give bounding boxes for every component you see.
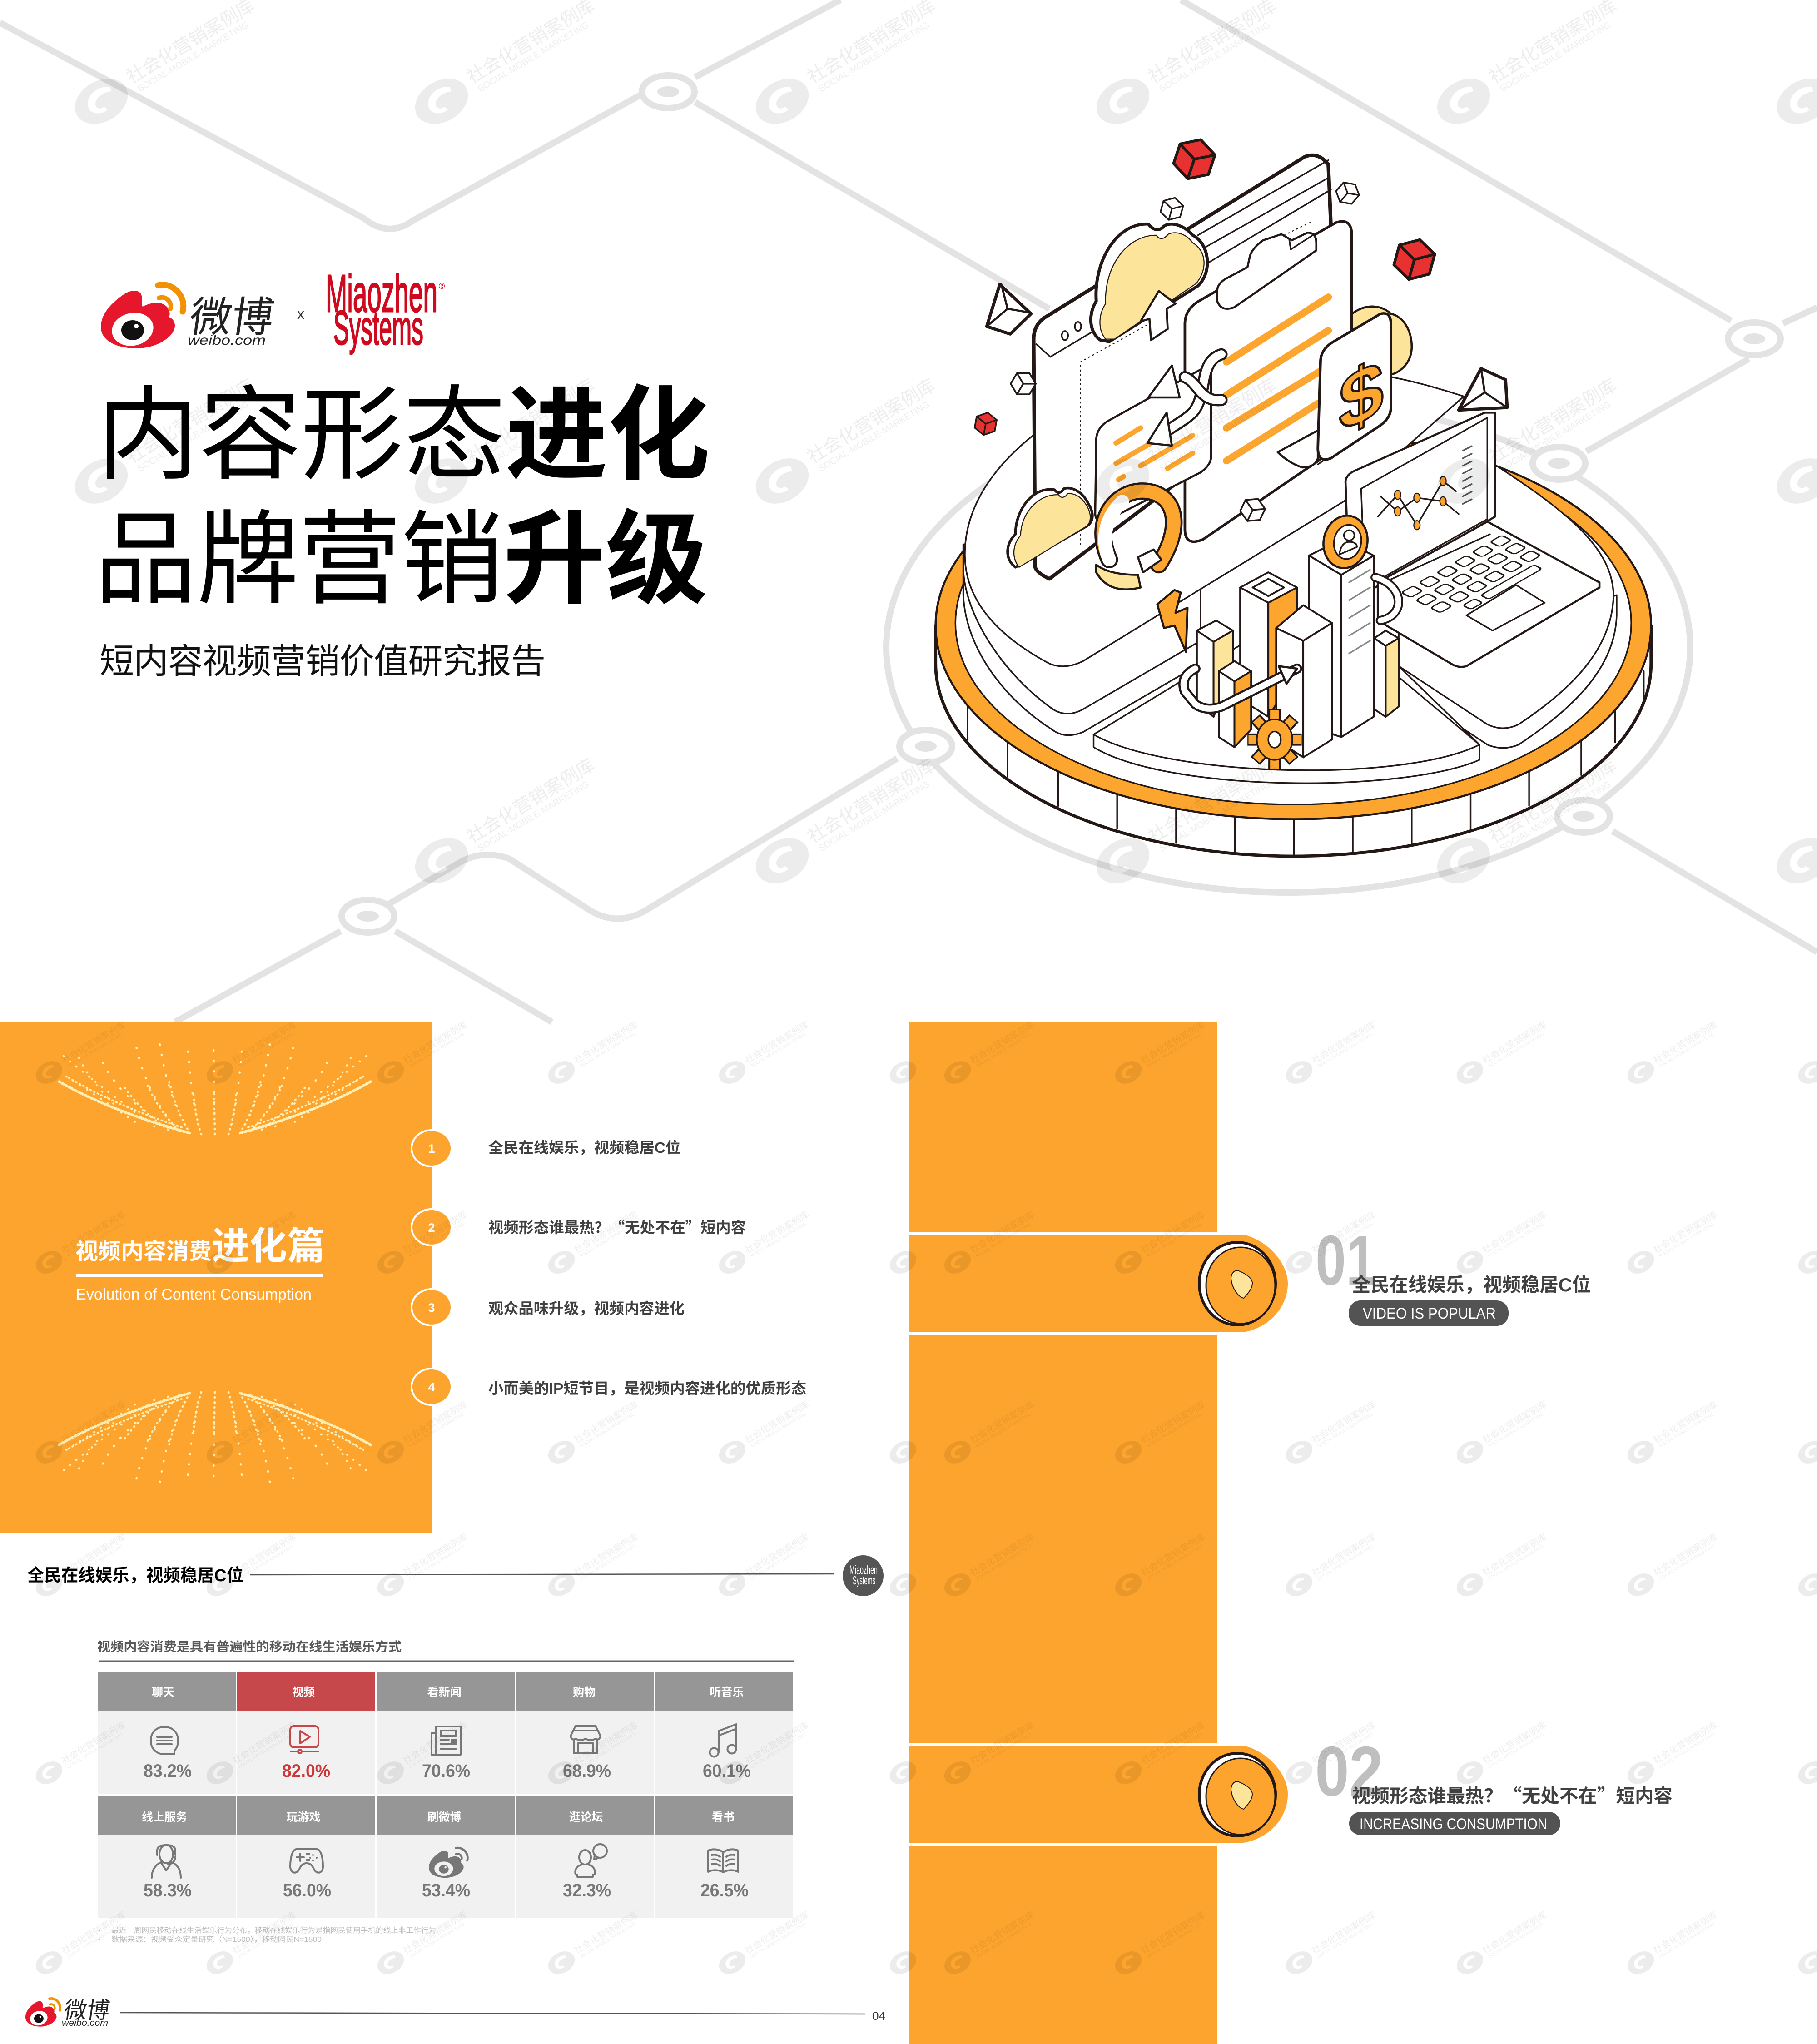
watermark layer: SOCIAL·MOBILE·MARKETING <box>66 1544 124 1582</box>
watermark layer: SOCIAL·MOBILE·MARKETING <box>237 1032 295 1069</box>
table: 53.4% <box>422 1880 470 1900</box>
watermark layer: SOCIAL·MOBILE·MARKETING <box>579 1222 636 1259</box>
Miaozhen Systems logo: Miaozhen <box>326 264 437 323</box>
agenda numbers: 3 <box>428 1301 435 1315</box>
watermark layer: 社会化营销案例库 <box>1310 1720 1378 1766</box>
watermark layer: SOCIAL·MOBILE·MARKETING <box>1658 1412 1716 1449</box>
panel: section cover <box>0 1022 806 1533</box>
watermark layer: SOCIAL·MOBILE·MARKETING <box>750 1412 807 1449</box>
watermark layer: SOCIAL·MOBILE·MARKETING <box>476 400 591 474</box>
watermark layer: SOCIAL·MOBILE·MARKETING <box>237 1412 295 1449</box>
watermark layer: SOCIAL·MOBILE·MARKETING <box>237 1222 295 1259</box>
watermark layer: SOCIAL·MOBILE·MARKETING <box>1487 1412 1545 1449</box>
icon: store <box>571 1726 601 1753</box>
watermark layer: SOCIAL·MOBILE·MARKETING <box>1146 1922 1203 1960</box>
agenda items: 全民在线娱乐，视频稳居C位 <box>488 1139 680 1156</box>
watermark layer: 社会化营销案例库 <box>231 1910 298 1956</box>
watermark layer: 社会化营销案例库 <box>231 1720 298 1766</box>
agenda items <box>488 1139 806 1397</box>
watermark layer: SOCIAL·MOBILE·MARKETING <box>237 1732 295 1770</box>
watermark layer: SOCIAL·MOBILE·MARKETING <box>66 1412 124 1449</box>
icon: music <box>710 1724 736 1757</box>
table: 82.0% <box>282 1761 330 1781</box>
watermark layer: SOCIAL·MOBILE·MARKETING <box>476 779 591 853</box>
icon: gamepad <box>290 1849 323 1873</box>
watermark layer: 社会化营销案例库 <box>123 375 258 467</box>
table: 32.3% <box>563 1880 611 1900</box>
table: 60.1% <box>703 1761 751 1781</box>
exchange arrows <box>1147 354 1221 446</box>
watermark layer: SOCIAL·MOBILE·MARKETING <box>975 1732 1033 1770</box>
table: 线上服务 <box>142 1811 187 1824</box>
watermark layer: SOCIAL·MOBILE·MARKETING <box>408 1032 466 1069</box>
arrow loop <box>1184 666 1297 709</box>
icon: small cloud <box>1008 488 1092 567</box>
watermark layer: 社会化营销案例库 <box>572 1399 640 1445</box>
watermark layer: 社会化营销案例库 <box>1145 755 1280 847</box>
watermark layer: 社会化营销案例库 <box>60 1399 128 1445</box>
watermark layer: SOCIAL·MOBILE·MARKETING <box>1316 1032 1374 1069</box>
isometric illustration <box>936 134 1651 856</box>
Miaozhen Systems logo: ® <box>439 282 445 291</box>
watermark layer: SOCIAL·MOBILE·MARKETING <box>408 1222 466 1259</box>
table: 56.0% <box>283 1880 331 1900</box>
watermark layer: SOCIAL·MOBILE·MARKETING <box>1498 779 1613 853</box>
platform base <box>936 375 1651 856</box>
watermark layer: SOCIAL·MOBILE·MARKETING <box>579 1032 636 1069</box>
watermark layer: 社会化营销案例库 <box>1652 1399 1719 1445</box>
footnotes <box>98 1926 436 1944</box>
watermark layer: SOCIAL·MOBILE·MARKETING <box>975 1544 1033 1582</box>
watermark layer: 社会化营销案例库 <box>402 1209 469 1255</box>
watermark layer: 社会化营销案例库 <box>402 1910 469 1956</box>
watermark layer: 社会化营销案例库 <box>1139 1910 1207 1956</box>
heading rule <box>250 1574 834 1575</box>
table: 视频 <box>292 1686 315 1699</box>
watermark layer: 社会化营销案例库 <box>572 1720 640 1766</box>
watermark layer: SOCIAL·MOBILE·MARKETING <box>66 1222 124 1259</box>
watermark layer: SOCIAL·MOBILE·MARKETING <box>66 1732 124 1770</box>
heading 02 <box>1315 1732 1673 1835</box>
watermark layer: SOCIAL·MOBILE·MARKETING <box>1658 1544 1716 1582</box>
weibo wordmark: 微博 <box>187 293 277 341</box>
watermark layer: 社会化营销案例库 <box>60 1532 128 1578</box>
watermark layer: SOCIAL·MOBILE·MARKETING <box>750 1032 807 1069</box>
watermark layer: 社会化营销案例库 <box>1485 755 1620 847</box>
watermark layer: 社会化营销案例库 <box>231 1532 298 1578</box>
Miaozhen badge: Miaozhen <box>849 1563 878 1577</box>
section english subtitle: Evolution of Content Consumption <box>76 1286 312 1303</box>
heading 01: 01 <box>1316 1221 1376 1300</box>
section title: 视频内容消费 <box>75 1239 212 1264</box>
watermark layer: 社会化营销案例库 <box>60 1019 128 1066</box>
icon: back cloud <box>1349 307 1412 375</box>
table: 聊天 <box>152 1686 174 1699</box>
watermark layer: 社会化营销案例库 <box>572 1910 640 1956</box>
chart heading: 视频内容消费是具有普遍性的移动在线生活娱乐方式 <box>97 1640 402 1654</box>
watermark layer: SOCIAL·MOBILE·MARKETING <box>750 1222 807 1259</box>
floating cubes <box>973 134 1507 526</box>
watermark layer: 社会化营销案例库 <box>1485 375 1620 467</box>
watermark layer: 社会化营销案例库 <box>743 1019 811 1066</box>
watermark layer: 社会化营销案例库 <box>572 1209 640 1255</box>
watermark layer: 社会化营销案例库 <box>231 1019 298 1066</box>
watermark layer: 社会化营销案例库 <box>572 1532 640 1578</box>
subtitle: 短内容视频营销价值研究报告 <box>99 642 546 681</box>
icon: video <box>290 1726 318 1753</box>
watermark layer: SOCIAL·MOBILE·MARKETING <box>1316 1732 1374 1770</box>
watermark layer: SOCIAL·MOBILE·MARKETING <box>579 1922 636 1960</box>
watermark layer: SOCIAL·MOBILE·MARKETING <box>476 20 591 94</box>
watermark layer: SOCIAL·MOBILE·MARKETING <box>237 1544 295 1582</box>
browser window <box>1034 155 1331 579</box>
watermark layer: 社会化营销案例库 <box>743 1532 811 1578</box>
table: 26.5% <box>700 1880 749 1900</box>
table: 68.9% <box>563 1761 611 1781</box>
watermark layer: 社会化营销案例库 <box>1481 1019 1549 1066</box>
Miaozhen badge <box>843 1555 884 1596</box>
icon: dollar card: $ <box>1339 341 1384 451</box>
icon: upload cloud <box>1091 224 1207 342</box>
heading 02: INCREASING CONSUMPTION <box>1360 1816 1547 1833</box>
table: 58.3% <box>144 1880 192 1900</box>
watermark layer: SOCIAL·MOBILE·MARKETING <box>1157 400 1272 474</box>
watermark layer: 社会化营销案例库 <box>231 1399 298 1445</box>
chart heading rule <box>99 1661 794 1662</box>
watermark layer: 社会化营销案例库 <box>968 1720 1036 1766</box>
watermark layer: 社会化营销案例库 <box>1652 1720 1719 1766</box>
watermark layer: 社会化营销案例库 <box>1652 1209 1719 1255</box>
watermark layer: SOCIAL·MOBILE·MARKETING <box>1146 1732 1203 1770</box>
tab 01 <box>908 1232 1288 1335</box>
table: 刷微博 <box>427 1811 462 1824</box>
agenda items: 小而美的IP短节目，是视频内容进化的优质形态 <box>488 1380 806 1397</box>
watermark layer: 社会化营销案例库 <box>402 1720 469 1766</box>
watermark layer: 社会化营销案例库 <box>968 1209 1036 1255</box>
watermark layer: SOCIAL·MOBILE·MARKETING <box>817 779 932 853</box>
weibo wordmark: weibo.com <box>188 333 266 348</box>
watermark layer: 社会化营销案例库 <box>804 375 939 467</box>
watermark layer: SOCIAL·MOBILE·MARKETING <box>579 1412 636 1449</box>
watermark layer: SOCIAL·MOBILE·MARKETING <box>136 400 251 474</box>
watermark layer: 社会化营销案例库 <box>463 375 598 467</box>
watermark layer: 社会化营销案例库 <box>743 1910 811 1956</box>
watermark layer: SOCIAL·MOBILE·MARKETING <box>817 400 932 474</box>
watermark layer: SOCIAL·MOBILE·MARKETING <box>1146 1032 1203 1069</box>
watermark layer: 社会化营销案例库 <box>1652 1910 1719 1956</box>
watermark layer: SOCIAL·MOBILE·MARKETING <box>408 1412 466 1449</box>
watermark layer: 社会化营销案例库 <box>743 1209 811 1255</box>
table: 逛论坛 <box>569 1811 603 1824</box>
table: 看书 <box>712 1811 735 1824</box>
panel: section dividers <box>908 1022 1673 2044</box>
table: 购物 <box>573 1686 596 1699</box>
watermark layer: SOCIAL·MOBILE·MARKETING <box>66 1032 124 1069</box>
watermark layer: 社会化营销案例库 <box>231 1209 298 1255</box>
watermark layer: SOCIAL·MOBILE·MARKETING <box>1487 1222 1545 1259</box>
watermark layer: SOCIAL·MOBILE·MARKETING <box>817 20 932 94</box>
bar chart buildings <box>1197 539 1399 757</box>
footer rule <box>120 2013 865 2014</box>
x separator: x <box>297 306 304 322</box>
watermark layer: 社会化营销案例库 <box>1310 1532 1378 1578</box>
Miaozhen Systems logo: Systems <box>333 301 423 355</box>
watermark layer: SOCIAL·MOBILE·MARKETING <box>1157 779 1272 853</box>
icon: dollar card <box>1318 313 1391 460</box>
heading 02: 视频形态谁最热？“无处不在”短内容 <box>1352 1781 1673 1808</box>
watermark layer: SOCIAL·MOBILE·MARKETING <box>975 1922 1033 1960</box>
icon: weibo logo small <box>25 1999 60 2027</box>
watermark layer: SOCIAL·MOBILE·MARKETING <box>1487 1544 1545 1582</box>
title: 品牌营销升级 <box>94 502 708 617</box>
dotted bowl top <box>58 1040 372 1134</box>
agenda items: 观众品味升级，视频内容进化 <box>488 1300 685 1317</box>
heading 02: 02 <box>1315 1732 1383 1811</box>
watermark layer: SOCIAL·MOBILE·MARKETING <box>1157 20 1272 94</box>
cover logos: weibo x Miaozhen <box>101 264 445 355</box>
watermark layer: 社会化营销案例库 <box>1139 1209 1207 1255</box>
watermark layer: 社会化营销案例库 <box>968 1532 1036 1578</box>
table <box>98 1672 793 1918</box>
watermark layer: 社会化营销案例库 <box>1310 1910 1378 1956</box>
watermark layer: 社会化营销案例库 <box>968 1399 1036 1445</box>
icon: weibo logo <box>101 285 184 350</box>
dotted bowl bottom <box>58 1392 372 1486</box>
watermark layer: 社会化营销案例库 <box>968 1910 1036 1956</box>
title <box>94 378 710 617</box>
watermark layer: 社会化营销案例库 <box>1481 1720 1549 1766</box>
agenda numbers: 4 <box>428 1380 435 1394</box>
watermark layer: SOCIAL·MOBILE·MARKETING <box>750 1544 807 1582</box>
watermark layer: SOCIAL·MOBILE·MARKETING <box>1498 400 1613 474</box>
watermark layer: 社会化营销案例库 <box>60 1910 128 1956</box>
footer <box>25 1998 885 2028</box>
tab 02 <box>908 1743 1288 1846</box>
document folder <box>1185 221 1352 541</box>
watermark layer: 社会化营销案例库 <box>1652 1532 1719 1578</box>
watermark layer: SOCIAL·MOBILE·MARKETING <box>408 1544 466 1582</box>
title: 内容形态进化 <box>97 378 710 492</box>
table: 听音乐 <box>710 1686 744 1699</box>
title underline <box>76 1274 323 1277</box>
laptop <box>1345 412 1599 667</box>
watermark layer: SOCIAL·MOBILE·MARKETING <box>579 1732 636 1770</box>
watermark layer: SOCIAL·MOBILE·MARKETING <box>237 1922 295 1960</box>
watermark layer: 社会化营销案例库 <box>1310 1399 1378 1445</box>
watermark layer: SOCIAL·MOBILE·MARKETING <box>1316 1544 1374 1582</box>
table: 玩游戏 <box>286 1811 321 1824</box>
watermark layer: SOCIAL·MOBILE·MARKETING <box>1658 1732 1716 1770</box>
watermark layer: SOCIAL·MOBILE·MARKETING <box>579 1544 636 1582</box>
icon: forum <box>575 1844 607 1877</box>
watermark layer: 社会化营销案例库 <box>1139 1019 1207 1066</box>
watermark layer: SOCIAL·MOBILE·MARKETING <box>1146 1222 1203 1259</box>
watermark layer: SOCIAL·MOBILE·MARKETING <box>136 20 251 94</box>
footnotes: 最近一周网民移动在线生活娱乐行为分布，移动在线娱乐行为是指网民使用手机的线上非工作行为 <box>111 1926 436 1935</box>
watermark layer: SOCIAL·MOBILE·MARKETING <box>1498 20 1613 94</box>
watermark layer: 社会化营销案例库 <box>60 1209 128 1255</box>
watermark layer: 社会化营销案例库 <box>1481 1532 1549 1578</box>
watermark layer: 社会化营销案例库 <box>402 1532 469 1578</box>
orange column <box>908 1022 1217 2044</box>
heading 01: VIDEO IS POPULAR <box>1363 1305 1496 1322</box>
watermark layer: SOCIAL·MOBILE·MARKETING <box>1316 1922 1374 1960</box>
agenda items: 视频形态谁最热？“无处不在”短内容 <box>488 1215 746 1237</box>
background network lines <box>0 0 1817 1022</box>
watermark layer: SOCIAL·MOBILE·MARKETING <box>975 1032 1033 1069</box>
watermark layer: 社会化营销案例库 <box>1310 1019 1378 1066</box>
watermark layer: SOCIAL·MOBILE·MARKETING <box>1487 1032 1545 1069</box>
watermark layer: SOCIAL·MOBILE·MARKETING <box>1146 1544 1203 1582</box>
watermark layer: SOCIAL·MOBILE·MARKETING <box>408 1922 466 1960</box>
orange column <box>0 1022 432 1533</box>
watermark layer: 社会化营销案例库 <box>743 1720 811 1766</box>
watermark layer: 社会化营销案例库 <box>804 755 939 847</box>
watermark layer: 社会化营销案例库 <box>1139 1532 1207 1578</box>
footnotes: • <box>98 1927 101 1935</box>
weibo wordmark small: 微博 <box>62 1998 111 2023</box>
watermark layer: 社会化营销案例库 <box>968 1019 1036 1066</box>
icon: agent <box>152 1845 181 1878</box>
page number: 04 <box>872 2010 885 2023</box>
watermark layer: SOCIAL·MOBILE·MARKETING <box>1316 1222 1374 1259</box>
watermark layer: SOCIAL·MOBILE·MARKETING <box>1316 1412 1374 1449</box>
watermark layer: SOCIAL·MOBILE·MARKETING <box>975 1222 1033 1259</box>
watermark layer: SOCIAL·MOBILE·MARKETING <box>1487 1732 1545 1770</box>
table: 70.6% <box>422 1761 470 1781</box>
footnotes: • <box>98 1936 101 1944</box>
watermark layer: 社会化营销案例库 <box>60 1720 128 1766</box>
agenda numbers <box>412 1130 452 1405</box>
heading 01 <box>1316 1221 1591 1326</box>
table: 83.2% <box>144 1761 192 1781</box>
watermark layer: 社会化营销案例库 <box>1145 375 1280 467</box>
watermark layer: 社会化营销案例库 <box>1139 1720 1207 1766</box>
icon: gear <box>1247 709 1302 770</box>
watermark layer: 社会化营销案例库 <box>1481 1399 1549 1445</box>
watermark layer: 社会化营销案例库 <box>463 755 598 847</box>
icon: lightning bolt <box>1157 590 1187 652</box>
table: 看新闻 <box>427 1686 462 1699</box>
watermark layer: SOCIAL·MOBILE·MARKETING <box>1487 1922 1545 1960</box>
watermark layer: 社会化营销案例库 <box>1652 1019 1719 1066</box>
icon: donut chart <box>1096 491 1174 590</box>
watermark layer: 社会化营销案例库 <box>402 1399 469 1445</box>
icon: user badge <box>1319 512 1372 571</box>
small text card <box>1095 370 1211 521</box>
agenda numbers: 1 <box>428 1142 435 1156</box>
watermark layer: SOCIAL·MOBILE·MARKETING <box>66 1922 124 1960</box>
watermark layer: SOCIAL·MOBILE·MARKETING <box>750 1732 807 1770</box>
watermark layer: SOCIAL·MOBILE·MARKETING <box>750 1922 807 1960</box>
watermark layer: 社会化营销案例库 <box>572 1019 640 1066</box>
weibo wordmark small: weibo.com <box>62 2018 108 2028</box>
heading 01: 全民在线娱乐，视频稳居C位 <box>1352 1274 1591 1295</box>
watermark layer: SOCIAL·MOBILE·MARKETING <box>1658 1922 1716 1960</box>
watermark layer: SOCIAL·MOBILE·MARKETING <box>408 1732 466 1770</box>
Miaozhen Systems logo <box>326 264 445 355</box>
footnotes: 数据来源：视频受众定量研究（N=1500），移动网民N=1500 <box>111 1935 322 1944</box>
watermark layer: 社会化营销案例库 <box>402 1019 469 1066</box>
icon: book <box>708 1849 738 1872</box>
icon: chat <box>151 1727 178 1754</box>
panel: data slide <box>25 1555 885 2028</box>
Miaozhen badge: Systems <box>853 1573 875 1587</box>
agenda numbers: 2 <box>428 1221 435 1235</box>
watermark layer: 社会化营销案例库 <box>1139 1399 1207 1445</box>
watermark layer: 社会化营销案例库 <box>743 1399 811 1445</box>
watermark layer: SOCIAL·MOBILE·MARKETING <box>1146 1412 1203 1449</box>
watermark layer: SOCIAL·MOBILE·MARKETING <box>975 1412 1033 1449</box>
watermark layer: SOCIAL·MOBILE·MARKETING <box>1658 1222 1716 1259</box>
watermark layer: 社会化营销案例库 <box>1481 1910 1549 1956</box>
section title: 进化篇 <box>212 1225 325 1267</box>
buckle loop <box>1375 577 1399 620</box>
slide heading: 全民在线娱乐，视频稳居C位 <box>27 1566 243 1585</box>
watermark layer: 社会化营销案例库 <box>1310 1209 1378 1255</box>
icon: weibo <box>429 1848 467 1878</box>
watermark layer: 社会化营销案例库 <box>1481 1209 1549 1255</box>
watermark layer: SOCIAL·MOBILE·MARKETING <box>1658 1032 1716 1069</box>
icon: news <box>432 1726 461 1755</box>
